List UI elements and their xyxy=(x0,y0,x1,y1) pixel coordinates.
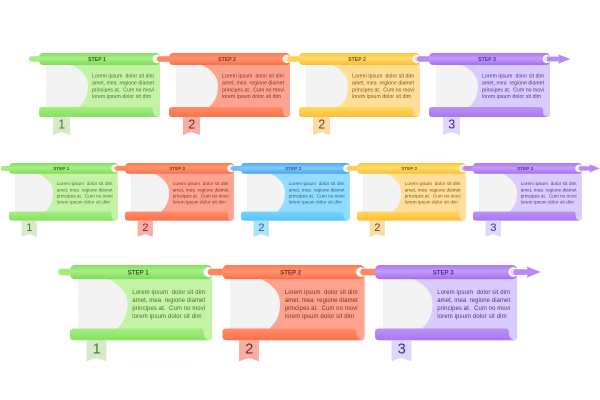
step number: 2 xyxy=(258,222,265,234)
number tab xyxy=(443,117,460,135)
body panel xyxy=(363,172,466,221)
step card: row 2 step 2 blue xyxy=(231,163,350,237)
step heading: STEP 3 xyxy=(517,166,534,171)
body panel xyxy=(247,172,350,221)
ring joint xyxy=(413,56,420,62)
step card: row 2 step 2 yellow xyxy=(347,163,466,237)
image placeholder xyxy=(15,174,53,212)
description text xyxy=(437,290,510,320)
arrow xyxy=(509,266,541,278)
description text: lorem ipsum dolor sit dim xyxy=(92,94,151,100)
bottom roller bar xyxy=(222,328,364,340)
step number: 2 xyxy=(374,222,381,234)
top roller bar xyxy=(70,265,212,279)
description text xyxy=(222,74,285,100)
description text: Lorem ipsum dolor sit dim xyxy=(222,74,284,80)
connector rod xyxy=(347,166,362,171)
description text: amet, mea regione diamet xyxy=(482,81,545,87)
step heading: STEP 3 xyxy=(433,269,454,276)
top roller bar xyxy=(125,163,234,174)
description text: lorem ipsum dolor sit dim xyxy=(289,199,342,204)
ring joint xyxy=(460,165,466,171)
body panel xyxy=(383,277,517,340)
step number: 2 xyxy=(188,118,195,132)
top roller bar xyxy=(429,53,550,65)
description text: amet, mea regione diamet xyxy=(352,81,415,87)
description text: principes at. Cum no movi xyxy=(521,194,576,199)
description text: principes at. Cum no movi xyxy=(222,87,284,93)
description text: Lorem ipsum dolor sit dim xyxy=(57,181,113,186)
number tab xyxy=(254,221,269,237)
step heading: STEP 3 xyxy=(478,57,496,63)
step card: row 2 step 2 orange xyxy=(115,163,234,237)
step heading: STEP 2 xyxy=(348,57,366,63)
step heading: STEP 1 xyxy=(128,269,149,276)
body panel xyxy=(46,63,160,117)
bottom roller bar xyxy=(429,107,549,117)
image placeholder xyxy=(231,279,280,328)
step number: 1 xyxy=(26,222,33,234)
description text: Lorem ipsum dolor sit dim xyxy=(521,181,577,186)
step number: 2 xyxy=(245,342,253,358)
description text: Lorem ipsum dolor sit dim xyxy=(92,74,154,80)
description text: Lorem ipsum dolor sit dim xyxy=(173,181,229,186)
number tab xyxy=(313,117,330,135)
description text: amet, mea regione diamet xyxy=(132,298,205,304)
description text: amet, mea regione diamet xyxy=(437,298,510,304)
bottom roller bar xyxy=(70,328,211,340)
step heading: STEP 2 xyxy=(169,166,186,171)
step number: 1 xyxy=(58,118,65,132)
description text: lorem ipsum dolor sit dim xyxy=(285,314,354,320)
top roller bar xyxy=(473,163,582,174)
description text: principes at. Cum no movi xyxy=(285,306,358,312)
number tab xyxy=(86,340,106,361)
ring joint xyxy=(283,56,290,62)
description text: principes at. Cum no movi xyxy=(482,87,544,93)
description text: lorem ipsum dolor sit dim xyxy=(482,94,541,100)
connector rod xyxy=(360,269,382,275)
body panel xyxy=(15,172,118,221)
description text xyxy=(405,181,461,204)
top roller bar xyxy=(222,265,365,279)
step card: row 1 step 1 green xyxy=(29,53,160,135)
description text: amet, mea regione diamet xyxy=(92,81,155,87)
description text xyxy=(132,290,205,320)
description text xyxy=(285,290,358,320)
top roller bar xyxy=(299,53,420,65)
description text: principes at. Cum no movi xyxy=(405,194,460,199)
description text: lorem ipsum dolor sit dim xyxy=(132,314,202,320)
description text: principes at. Cum no movi xyxy=(437,306,510,312)
arrow xyxy=(543,54,570,64)
connector rod xyxy=(58,269,77,275)
step card: row 3 step 3 purple xyxy=(360,265,541,361)
step number: 2 xyxy=(142,222,149,234)
number tab xyxy=(239,340,259,361)
description text: Lorem ipsum dolor sit dim xyxy=(437,290,510,296)
description text: principes at. Cum no movi xyxy=(289,194,344,199)
step number: 2 xyxy=(318,118,325,132)
image placeholder xyxy=(306,65,348,107)
image placeholder xyxy=(247,174,285,212)
bottom roller bar xyxy=(241,212,349,221)
description text: lorem ipsum dolor sit dim xyxy=(405,199,458,204)
description text: amet, mea regione diamet xyxy=(289,187,345,192)
description text: lorem ipsum dolor sit dim xyxy=(352,94,411,100)
description text: Lorem ipsum dolor sit dim xyxy=(285,290,358,296)
connector rod xyxy=(29,56,45,62)
step heading: STEP 2 xyxy=(401,166,418,171)
body panel xyxy=(479,172,582,221)
step heading: STEP 2 xyxy=(280,269,302,276)
step card: row 3 step 2 orange xyxy=(208,265,365,361)
description text: amet, mea regione diamet xyxy=(173,187,229,192)
row 1: four step cards xyxy=(29,53,570,135)
step card: row 1 step 2 yellow xyxy=(287,53,420,135)
description text: lorem ipsum dolor sit dim xyxy=(437,314,507,320)
bottom roller bar xyxy=(125,212,233,221)
step number: 3 xyxy=(448,118,455,132)
step heading: STEP 2 xyxy=(285,166,302,171)
body panel xyxy=(78,277,212,340)
bottom roller bar xyxy=(9,212,117,221)
description text: principes at. Cum no movi xyxy=(92,87,154,93)
step card: row 1 step 2 orange xyxy=(157,53,290,135)
number tab xyxy=(486,221,501,237)
step heading: STEP 1 xyxy=(88,57,106,63)
description text: amet, mea regione diamet xyxy=(222,81,285,87)
top roller bar xyxy=(169,53,290,65)
connector rod xyxy=(115,166,130,171)
row 3: three step cards xyxy=(58,265,541,361)
description text: lorem ipsum dolor sit dim xyxy=(521,199,574,204)
image placeholder xyxy=(363,174,401,212)
connector rod xyxy=(157,56,175,62)
connector rod xyxy=(463,166,478,171)
bottom roller bar xyxy=(375,328,516,340)
row 2: five step cards xyxy=(1,163,600,237)
top roller bar xyxy=(375,265,517,279)
description text xyxy=(352,74,415,100)
ring joint xyxy=(344,165,350,171)
step card: row 3 step 1 green xyxy=(58,265,212,361)
ring joint xyxy=(228,165,234,171)
top roller bar xyxy=(357,163,466,174)
number tab xyxy=(370,221,385,237)
image placeholder xyxy=(176,65,218,107)
description text: amet, mea regione diamet xyxy=(57,187,113,192)
description text xyxy=(482,74,545,100)
ring joint xyxy=(112,165,118,171)
number tab xyxy=(53,117,70,135)
description text: principes at. Cum no movi xyxy=(132,306,205,312)
step number: 3 xyxy=(398,342,406,358)
ring joint xyxy=(153,56,160,62)
description text: Lorem ipsum dolor sit dim xyxy=(132,290,205,296)
number tab xyxy=(138,221,153,237)
image placeholder xyxy=(131,174,169,212)
ring joint xyxy=(204,268,212,276)
bottom roller bar xyxy=(473,212,581,221)
description text: principes at. Cum no movi xyxy=(352,87,414,93)
image placeholder xyxy=(78,279,128,328)
connector rod xyxy=(417,56,435,62)
description text xyxy=(289,181,345,204)
body panel xyxy=(131,172,234,221)
description text xyxy=(92,74,155,100)
image placeholder xyxy=(46,65,88,107)
description text: Lorem ipsum dolor sit dim xyxy=(289,181,345,186)
bottom roller bar xyxy=(39,107,159,117)
body panel xyxy=(231,277,365,340)
number tab xyxy=(22,221,37,237)
description text: amet, mea regione diamet xyxy=(285,298,358,304)
bottom roller bar xyxy=(169,107,289,117)
description text: lorem ipsum dolor sit dim xyxy=(222,94,281,100)
step heading: STEP 2 xyxy=(218,57,236,63)
top roller bar xyxy=(9,163,118,174)
bottom roller bar xyxy=(299,107,419,117)
description text: Lorem ipsum dolor sit dim xyxy=(405,181,461,186)
image placeholder xyxy=(436,65,478,107)
body panel xyxy=(176,63,290,117)
number tab xyxy=(183,117,200,135)
description text xyxy=(57,181,113,204)
description text: amet, mea regione diamet xyxy=(405,187,461,192)
connector rod xyxy=(287,56,305,62)
step card: row 1 step 3 purple xyxy=(417,53,570,135)
connector rod xyxy=(208,269,230,275)
step card: row 2 step 3 purple xyxy=(463,163,600,237)
description text: Lorem ipsum dolor sit dim xyxy=(352,74,414,80)
bottom roller bar xyxy=(357,212,465,221)
step number: 3 xyxy=(490,222,497,234)
ring joint xyxy=(357,268,365,276)
number tab xyxy=(391,340,411,361)
arrow xyxy=(576,164,600,173)
description text: principes at. Cum no movi xyxy=(57,194,112,199)
description text: amet, mea regione diamet xyxy=(521,187,577,192)
step number: 1 xyxy=(93,342,101,358)
description text: lorem ipsum dolor sit dim xyxy=(173,199,226,204)
image placeholder xyxy=(383,279,433,328)
description text xyxy=(173,181,229,204)
step heading: STEP 1 xyxy=(53,166,70,171)
description text: principes at. Cum no movi xyxy=(173,194,228,199)
connector rod xyxy=(1,166,14,171)
image placeholder xyxy=(479,174,517,212)
description text xyxy=(521,181,577,204)
body panel xyxy=(306,63,420,117)
connector rod xyxy=(231,166,246,171)
description text: lorem ipsum dolor sit dim xyxy=(57,199,110,204)
top roller bar xyxy=(39,53,160,65)
top roller bar xyxy=(241,163,350,174)
body panel xyxy=(436,63,550,117)
description text: Lorem ipsum dolor sit dim xyxy=(482,74,544,80)
step card: row 2 step 1 green xyxy=(1,163,118,237)
